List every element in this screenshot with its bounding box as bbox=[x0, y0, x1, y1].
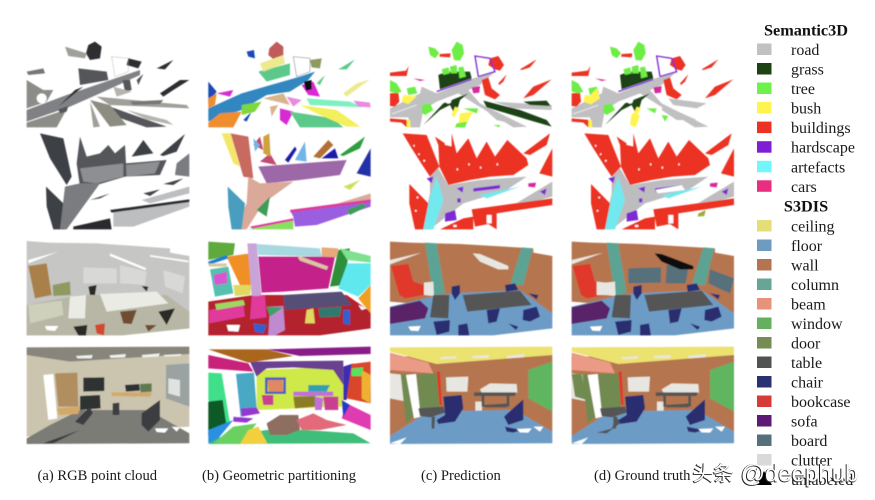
legend item: ceiling bbox=[757, 218, 835, 236]
panel: ground truth, outdoor building bbox=[584, 133, 734, 229]
legend item: unlabeled: unlabeled bbox=[791, 472, 853, 489]
legend item: buildings bbox=[757, 120, 851, 137]
caption: RGB point cloud: (a) RGB point cloud bbox=[38, 468, 158, 484]
panel: prediction, outdoor building bbox=[403, 133, 552, 229]
caption: geometric partitioning: (b) Geometric partitioning bbox=[202, 468, 357, 484]
legend item: sofa bbox=[757, 414, 818, 430]
legend item: cars bbox=[757, 179, 817, 196]
legend item: grass bbox=[757, 62, 824, 78]
legend item: column bbox=[757, 277, 839, 294]
legend item: tree bbox=[757, 81, 815, 98]
legend item: chair bbox=[757, 374, 824, 392]
panel: prediction, indoor room 2 bbox=[390, 347, 552, 444]
legend item: wall bbox=[757, 258, 819, 274]
legend item: sofa: sofa bbox=[791, 414, 818, 430]
legend item: hardscape: hardscape bbox=[791, 140, 855, 157]
legend item: door bbox=[757, 336, 821, 352]
legend item: bush: bush bbox=[791, 101, 821, 118]
legend item: tree: tree bbox=[791, 81, 815, 98]
legend item: hardscape bbox=[757, 140, 855, 157]
watermark: 头条 bbox=[692, 457, 733, 487]
legend: S3DIS bbox=[757, 196, 853, 489]
panel: RGB point cloud, outdoor building bbox=[40, 133, 189, 229]
legend item: window: window bbox=[791, 316, 843, 333]
legend item: cars: cars bbox=[791, 179, 817, 196]
legend item: ceiling: ceiling bbox=[791, 218, 835, 236]
legend item: table bbox=[757, 355, 822, 372]
legend item: board bbox=[757, 433, 827, 450]
watermark bbox=[692, 456, 858, 488]
panel: prediction, outdoor street bbox=[390, 42, 552, 127]
legend heading: S3DIS bbox=[784, 196, 828, 216]
legend item: bookcase bbox=[757, 394, 851, 411]
legend item: beam: beam bbox=[791, 296, 826, 314]
panel: geometric partitioning, outdoor building bbox=[222, 133, 371, 229]
legend item: door: door bbox=[791, 336, 821, 352]
legend item: road bbox=[757, 42, 819, 59]
legend item: bush bbox=[757, 101, 821, 118]
panel: prediction, indoor room 1 bbox=[390, 242, 552, 335]
legend item: bookcase: bookcase bbox=[791, 394, 851, 411]
legend: Semantic3D bbox=[757, 20, 855, 196]
legend heading: Semantic3D bbox=[764, 20, 848, 40]
panel: geometric partitioning, outdoor street bbox=[208, 42, 371, 127]
panel: ground truth, indoor room 2 bbox=[572, 347, 734, 444]
caption: prediction: (c) Prediction bbox=[421, 468, 502, 484]
watermark: 头条 bbox=[693, 456, 734, 486]
legend item: floor: floor bbox=[791, 238, 823, 255]
panel: geometric partitioning, indoor room 2 bbox=[208, 347, 371, 444]
panel: RGB point cloud, outdoor street bbox=[27, 42, 189, 127]
legend item: artefacts: artefacts bbox=[791, 159, 845, 176]
legend item: wall: wall bbox=[791, 258, 819, 274]
legend item: column: column bbox=[791, 277, 839, 294]
legend item: board: board bbox=[791, 433, 827, 450]
legend item: clutter: clutter bbox=[791, 452, 833, 470]
legend item: table: table bbox=[791, 355, 822, 372]
legend item: road: road bbox=[791, 42, 819, 59]
watermark: @deephub bbox=[741, 460, 858, 487]
legend item: buildings: buildings bbox=[791, 120, 851, 137]
legend item: clutter bbox=[757, 452, 833, 470]
legend item: chair: chair bbox=[791, 374, 824, 392]
legend item: floor bbox=[757, 238, 823, 255]
legend item: unlabeled bbox=[757, 471, 853, 489]
legend item: beam bbox=[757, 296, 826, 314]
panel: ground truth, indoor room 1 bbox=[572, 242, 734, 335]
panel: ground truth, outdoor street bbox=[572, 42, 733, 127]
legend item: grass: grass bbox=[791, 62, 824, 78]
legend item: window bbox=[757, 316, 843, 333]
panel: geometric partitioning, indoor room 1 bbox=[208, 242, 371, 335]
panel: RGB point cloud, indoor room 1 bbox=[27, 241, 189, 335]
watermark: @deephub bbox=[740, 461, 858, 488]
legend item: artefacts bbox=[757, 159, 845, 176]
panel: RGB point cloud, indoor room 2 bbox=[27, 347, 189, 444]
caption: ground truth: (d) Ground truth bbox=[594, 468, 691, 484]
